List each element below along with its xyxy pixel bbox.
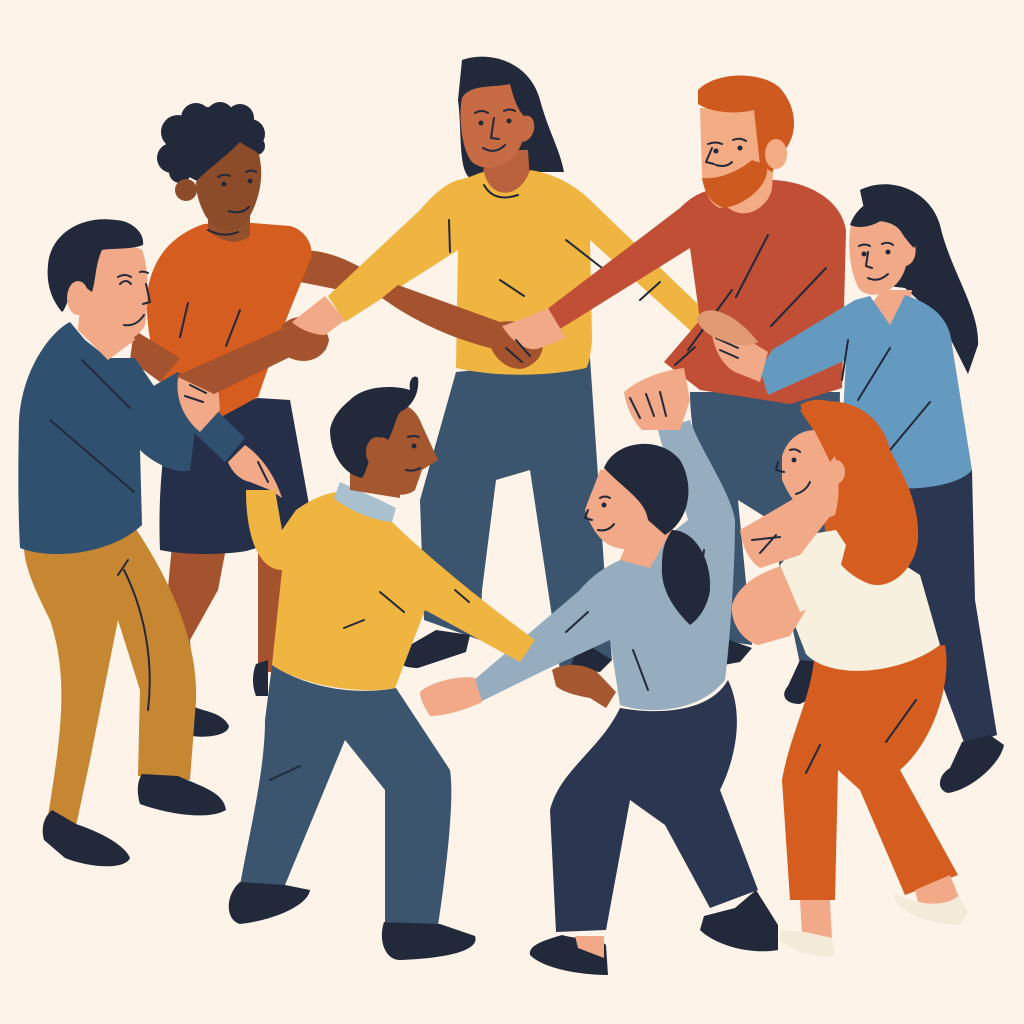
person: woman in yellow sweater and blue jeans [328,57,706,672]
hand: yellow sweater woman's left hand [292,296,345,335]
hand: right woman's hand [712,329,768,382]
person: woman in orange top and dark skirt [147,102,392,737]
hand: man's clasped hand [177,372,220,432]
hand: raised hand [624,368,690,430]
person: woman in grey-blue sweater and navy trousers [420,368,778,975]
arm: red sweater man's hand on clasp [697,310,758,345]
person: left man in navy sweater and mustard trousers [18,219,282,866]
person: man with red beard and red sweater [546,75,846,704]
person: redhead woman in cream top and orange trousers [732,400,968,956]
person: woman in blue sweater and dark trousers [712,184,1004,793]
arm: orange top woman's brown forearm [176,328,326,394]
hands: central clasp [484,321,543,369]
hand: brown hand at lower centre [552,665,616,708]
arm: orange-top woman's forearm across the yellow sweater [382,285,500,350]
hand: man's lower hand [228,445,282,498]
hand: woman's clasped hand at left [282,317,329,361]
person: man in yellow sweater and blue trousers [229,376,616,960]
hand: open hand at lower left [420,677,482,716]
